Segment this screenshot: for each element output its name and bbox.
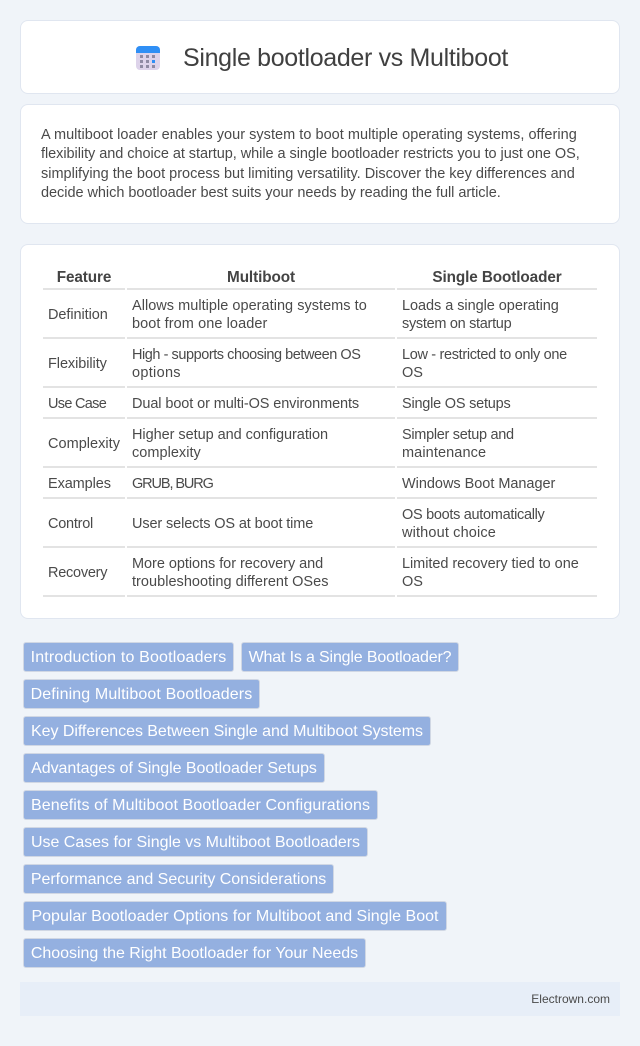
row: Recovery: troubleshooting different OSes bbox=[132, 574, 329, 590]
row: Flexibility: options bbox=[132, 365, 181, 381]
tag: Advantages bbox=[23, 753, 325, 783]
row: Definition: system on startup bbox=[402, 316, 511, 332]
row: Control: User selects OS at boot time bbox=[132, 516, 313, 532]
row: Examples: Examples bbox=[48, 476, 111, 492]
row: Complexity: Complexity bbox=[48, 436, 120, 452]
row: Control: OS boots automatically bbox=[402, 507, 544, 523]
tag: Benefits bbox=[23, 790, 378, 820]
table header row: Single Bootloader bbox=[432, 269, 562, 286]
title: Single bootloader vs Multiboot bbox=[183, 44, 508, 72]
intro paragraph bbox=[41, 127, 580, 201]
row: Flexibility: High - supports choosing between OS bbox=[132, 347, 360, 363]
comparison table bbox=[43, 269, 597, 597]
row: Definition: boot from one loader bbox=[132, 316, 267, 332]
panel: comparison table bbox=[20, 244, 620, 619]
intro paragraph: simplifying the boot process but limiting versatility. Discover the key differences and bbox=[41, 166, 575, 182]
footer bbox=[20, 982, 620, 1016]
row: Definition bbox=[48, 298, 559, 332]
tag: Performance bbox=[23, 864, 334, 894]
row: Examples: Windows Boot Manager bbox=[402, 476, 555, 492]
row: Use Case: Dual boot or multi-OS environments bbox=[132, 396, 359, 412]
tag: Introduction to Bootloaders bbox=[23, 642, 234, 672]
table header row: Multiboot bbox=[227, 269, 295, 286]
tag: Choosing: Choosing the Right Bootloader for Your Needs bbox=[31, 945, 358, 962]
tag: Key Differences bbox=[23, 716, 431, 746]
row: Use Case: Single OS setups bbox=[402, 396, 511, 412]
row: Recovery: More options for recovery and bbox=[132, 556, 323, 572]
tag: Performance: Performance and Security Considerations bbox=[31, 871, 326, 888]
row: Flexibility: Flexibility bbox=[48, 356, 107, 372]
intro paragraph: decide which bootloader best suits your needs by reading the full article. bbox=[41, 185, 501, 201]
row: Complexity: complexity bbox=[132, 445, 201, 461]
table header row bbox=[57, 269, 562, 286]
intro paragraph: A multiboot loader enables your system to boot multiple operating systems, offering bbox=[41, 127, 577, 143]
icon: calendar grid bbox=[136, 46, 160, 70]
tag: Popular Options: Popular Bootloader Options for Multiboot and Single Boot bbox=[31, 908, 439, 925]
panel: title header bbox=[20, 20, 620, 94]
tag: Popular Options bbox=[23, 901, 447, 931]
topic tags bbox=[23, 642, 459, 968]
row: Control: Control bbox=[48, 516, 93, 532]
row: Flexibility: OS bbox=[402, 365, 423, 381]
row: Control bbox=[48, 507, 545, 541]
row: Examples: GRUB, BURG bbox=[132, 476, 213, 492]
panel: introduction text bbox=[20, 104, 620, 224]
row: Use Case: Use Case bbox=[48, 396, 106, 412]
row: Complexity: Simpler setup and bbox=[402, 427, 514, 443]
tag: Use Cases: Use Cases for Single vs Multiboot Bootloaders bbox=[31, 834, 360, 851]
row: Use Case bbox=[48, 396, 511, 412]
tag: Use Cases bbox=[23, 827, 368, 857]
tag: Benefits: Benefits of Multiboot Bootloader Configurations bbox=[31, 797, 370, 814]
row: Definition: Loads a single operating bbox=[402, 298, 559, 314]
row: Flexibility bbox=[48, 347, 567, 381]
intro paragraph: flexibility and choice at startup, while a single bootloader restricts you to just one OS, bbox=[41, 146, 580, 162]
row: Complexity: maintenance bbox=[402, 445, 486, 461]
row: Recovery: Limited recovery tied to one bbox=[402, 556, 579, 572]
tag: Key Differences: Key Differences Between Single and Multiboot Systems bbox=[31, 723, 423, 740]
row: Recovery bbox=[48, 556, 579, 590]
row: Definition: Definition bbox=[48, 307, 108, 323]
tag: Choosing bbox=[23, 938, 366, 968]
row: Control: without choice bbox=[402, 525, 496, 541]
tag: Defining Multiboot Bootloaders: Defining Multiboot Bootloaders bbox=[31, 686, 252, 703]
tag: Advantages: Advantages of Single Bootloader Setups bbox=[31, 760, 317, 777]
tag: What Is a Single Bootloader? bbox=[241, 642, 459, 672]
tag: Introduction to Bootloaders: Introduction to Bootloaders bbox=[31, 649, 226, 666]
footer credit: Electrown.com bbox=[531, 992, 610, 1006]
row: Recovery: OS bbox=[402, 574, 423, 590]
tag: Defining Multiboot Bootloaders bbox=[23, 679, 260, 709]
row: Examples bbox=[48, 476, 556, 492]
row: Flexibility: Low - restricted to only one bbox=[402, 347, 567, 363]
row: Recovery: Recovery bbox=[48, 565, 107, 581]
row: Complexity bbox=[48, 427, 514, 461]
tag: What Is a Single Bootloader?: What Is a Single Bootloader? bbox=[249, 649, 451, 666]
row: Complexity: Higher setup and configuration bbox=[132, 427, 328, 443]
row: Definition: Allows multiple operating systems to bbox=[132, 298, 367, 314]
table header row: Feature bbox=[57, 269, 111, 286]
